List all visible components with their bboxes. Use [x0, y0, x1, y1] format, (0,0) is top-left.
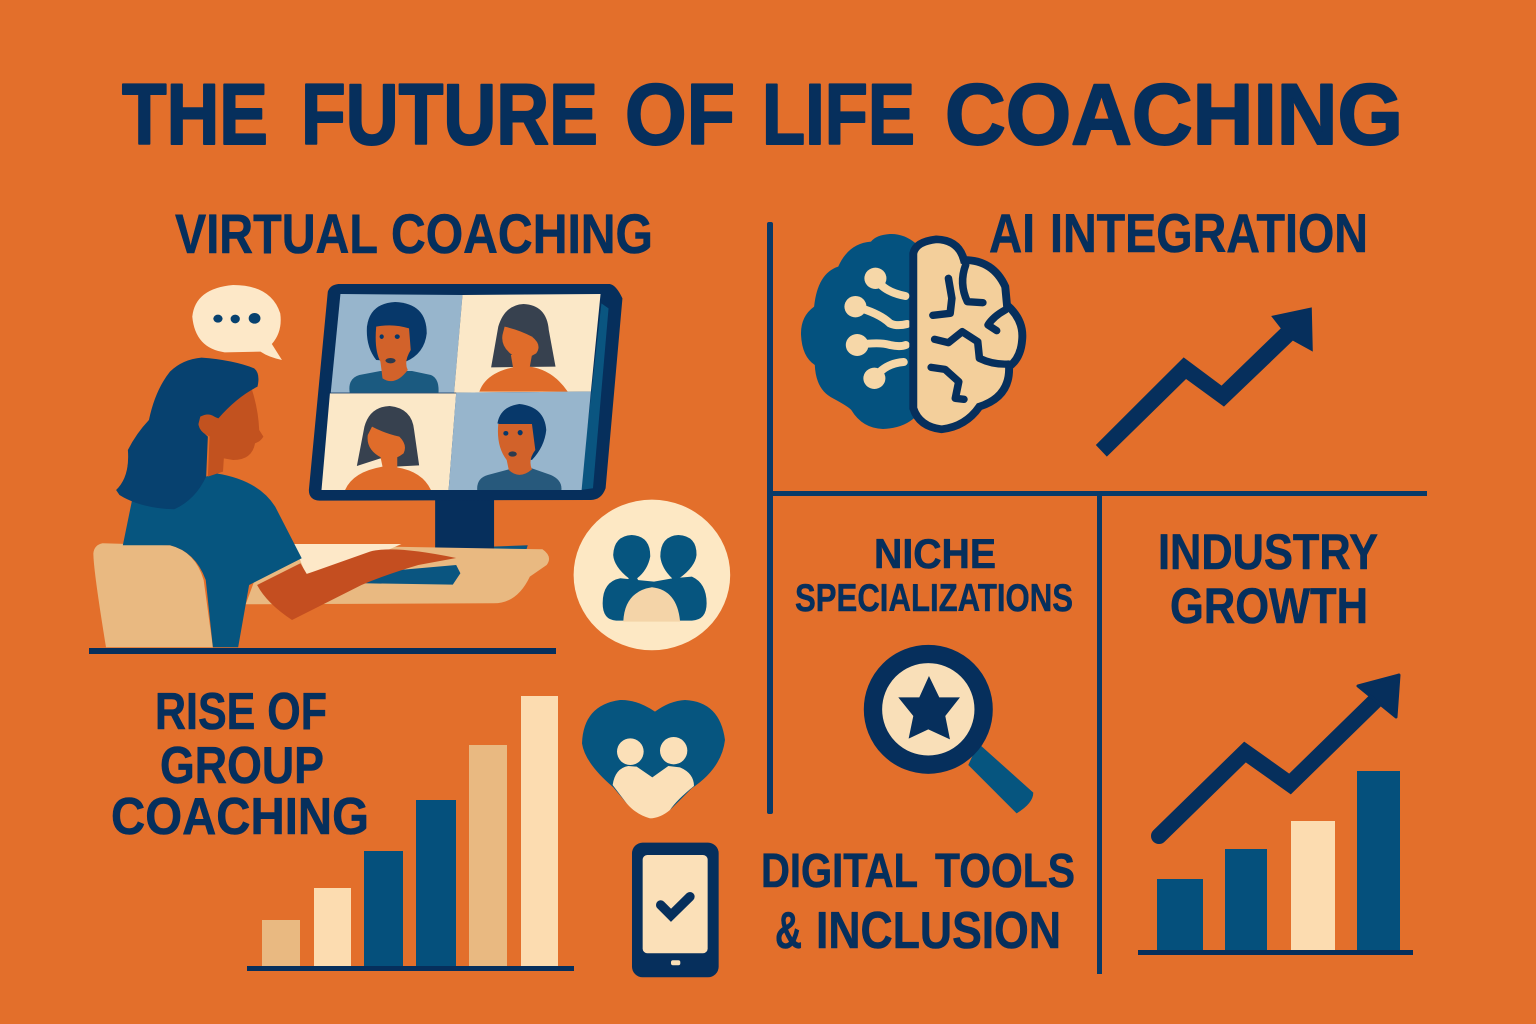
bar chart: industry growth [1138, 771, 1413, 955]
video tile: top right [454, 294, 601, 393]
heading: digital tools and inclusion: INCLUSION [816, 902, 1061, 960]
icon: tablet with check mark [632, 843, 719, 977]
bar chart: group coaching growth [247, 696, 574, 971]
title: THE [122, 67, 268, 163]
title: OF [625, 67, 735, 163]
heading: virtual coaching: COACHING [391, 202, 653, 265]
heading: niche specializations [795, 530, 1073, 620]
heading: digital tools and inclusion: DIGITAL [761, 845, 918, 898]
brain: circuit half [801, 234, 916, 429]
panel: virtual coaching [89, 202, 730, 654]
heading: niche specializations: NICHE [874, 530, 996, 577]
chair [93, 543, 213, 647]
heading: AI integration: INTEGRATION [1050, 202, 1368, 264]
heading: digital tools and inclusion: & [775, 902, 802, 960]
heading: industry growth: GROWTH [1170, 578, 1368, 634]
monitor [309, 284, 622, 501]
ground line [89, 648, 556, 654]
heading: digital tools and inclusion: TOOLS [935, 845, 1075, 898]
heading: niche specializations: SPECIALIZATIONS [795, 577, 1073, 620]
video tile: top left [331, 294, 462, 393]
heading: rise of group coaching: RISE OF [155, 683, 327, 741]
arrow: growth trend [1159, 675, 1399, 836]
heading: industry growth: INDUSTRY [1158, 524, 1378, 580]
panel: rise of group coaching [111, 683, 574, 971]
title [122, 67, 1403, 163]
video tile: bottom right [449, 392, 591, 490]
woman: ear [199, 415, 216, 437]
title: LIFE [762, 67, 915, 163]
icons: heart and tablet [582, 700, 725, 977]
heading: rise of group coaching [111, 683, 369, 846]
woman: torso [123, 473, 302, 647]
icon: group circle [574, 500, 730, 650]
icon: heart with people [582, 700, 725, 818]
icon: speech bubble [192, 285, 282, 360]
desk [246, 544, 549, 604]
arrow: upward trend [1096, 307, 1313, 457]
heading: rise of group coaching: COACHING [111, 788, 369, 846]
video tile: bottom left [321, 393, 456, 490]
heading: virtual coaching: VIRTUAL [175, 202, 378, 265]
woman: arm [257, 549, 456, 620]
brain: organic half [913, 239, 1022, 429]
title: FUTURE [301, 67, 598, 163]
heading: virtual coaching [175, 202, 653, 265]
icon: brain and arrow [801, 234, 1313, 457]
illustration: woman on video call [93, 284, 730, 650]
woman: hair [116, 358, 258, 509]
woman: neck and face [208, 390, 263, 477]
panel: industry growth [1138, 524, 1413, 955]
heading: digital tools and inclusion [761, 845, 1075, 960]
title: COACHING [945, 67, 1403, 163]
icon: magnifying glass with star [873, 654, 1033, 813]
panel: AI integration [801, 202, 1368, 457]
heading: industry growth [1158, 524, 1378, 634]
monitor stand [397, 497, 528, 559]
heading: rise of group coaching: GROUP [160, 737, 324, 795]
panel: niche specializations [795, 530, 1073, 813]
heading: AI integration: AI [989, 202, 1035, 264]
